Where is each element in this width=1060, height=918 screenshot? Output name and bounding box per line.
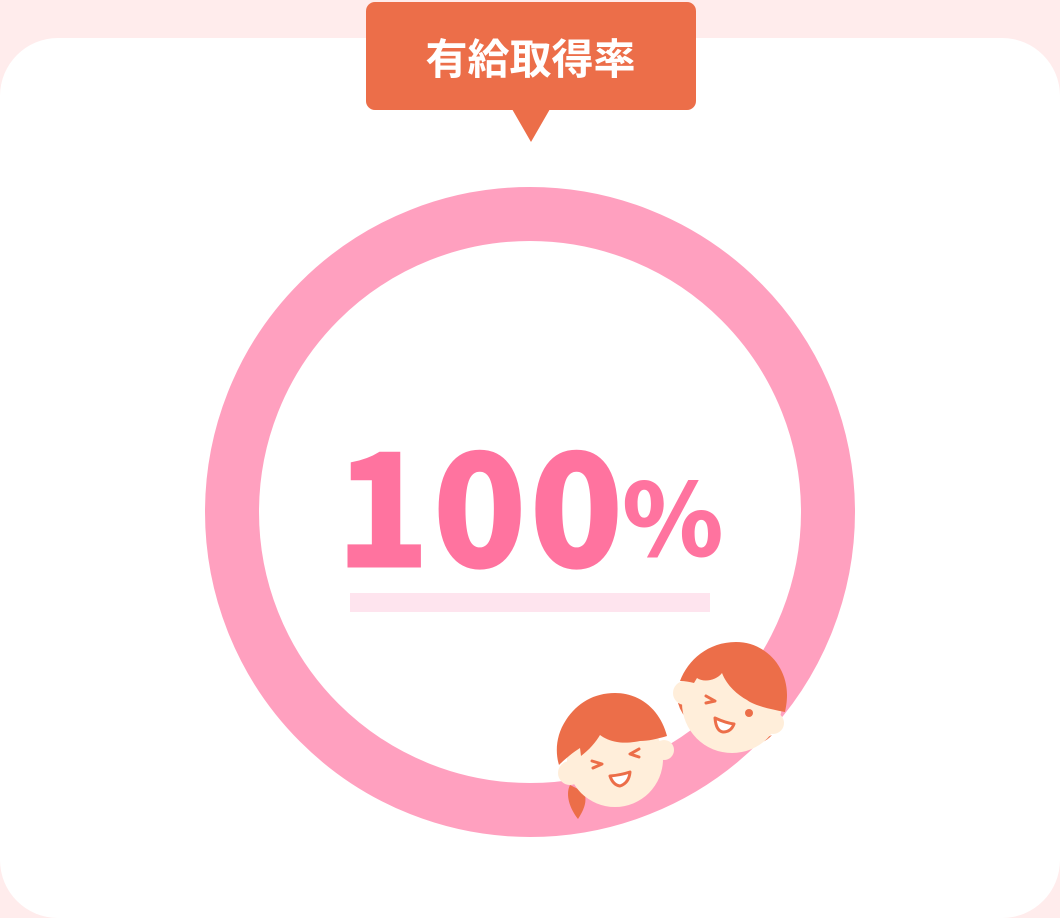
donut ring chart (232, 214, 828, 810)
value: 100 percent: % (622, 441, 724, 586)
icon: laughing boy (673, 642, 787, 753)
heading badge: paid leave rate (366, 2, 696, 142)
heading badge: paid leave rate: 有給取得率 (425, 36, 636, 83)
underline highlight (350, 593, 710, 612)
value: 100 percent: 100 (336, 389, 626, 612)
icon: laughing girl (557, 693, 674, 819)
